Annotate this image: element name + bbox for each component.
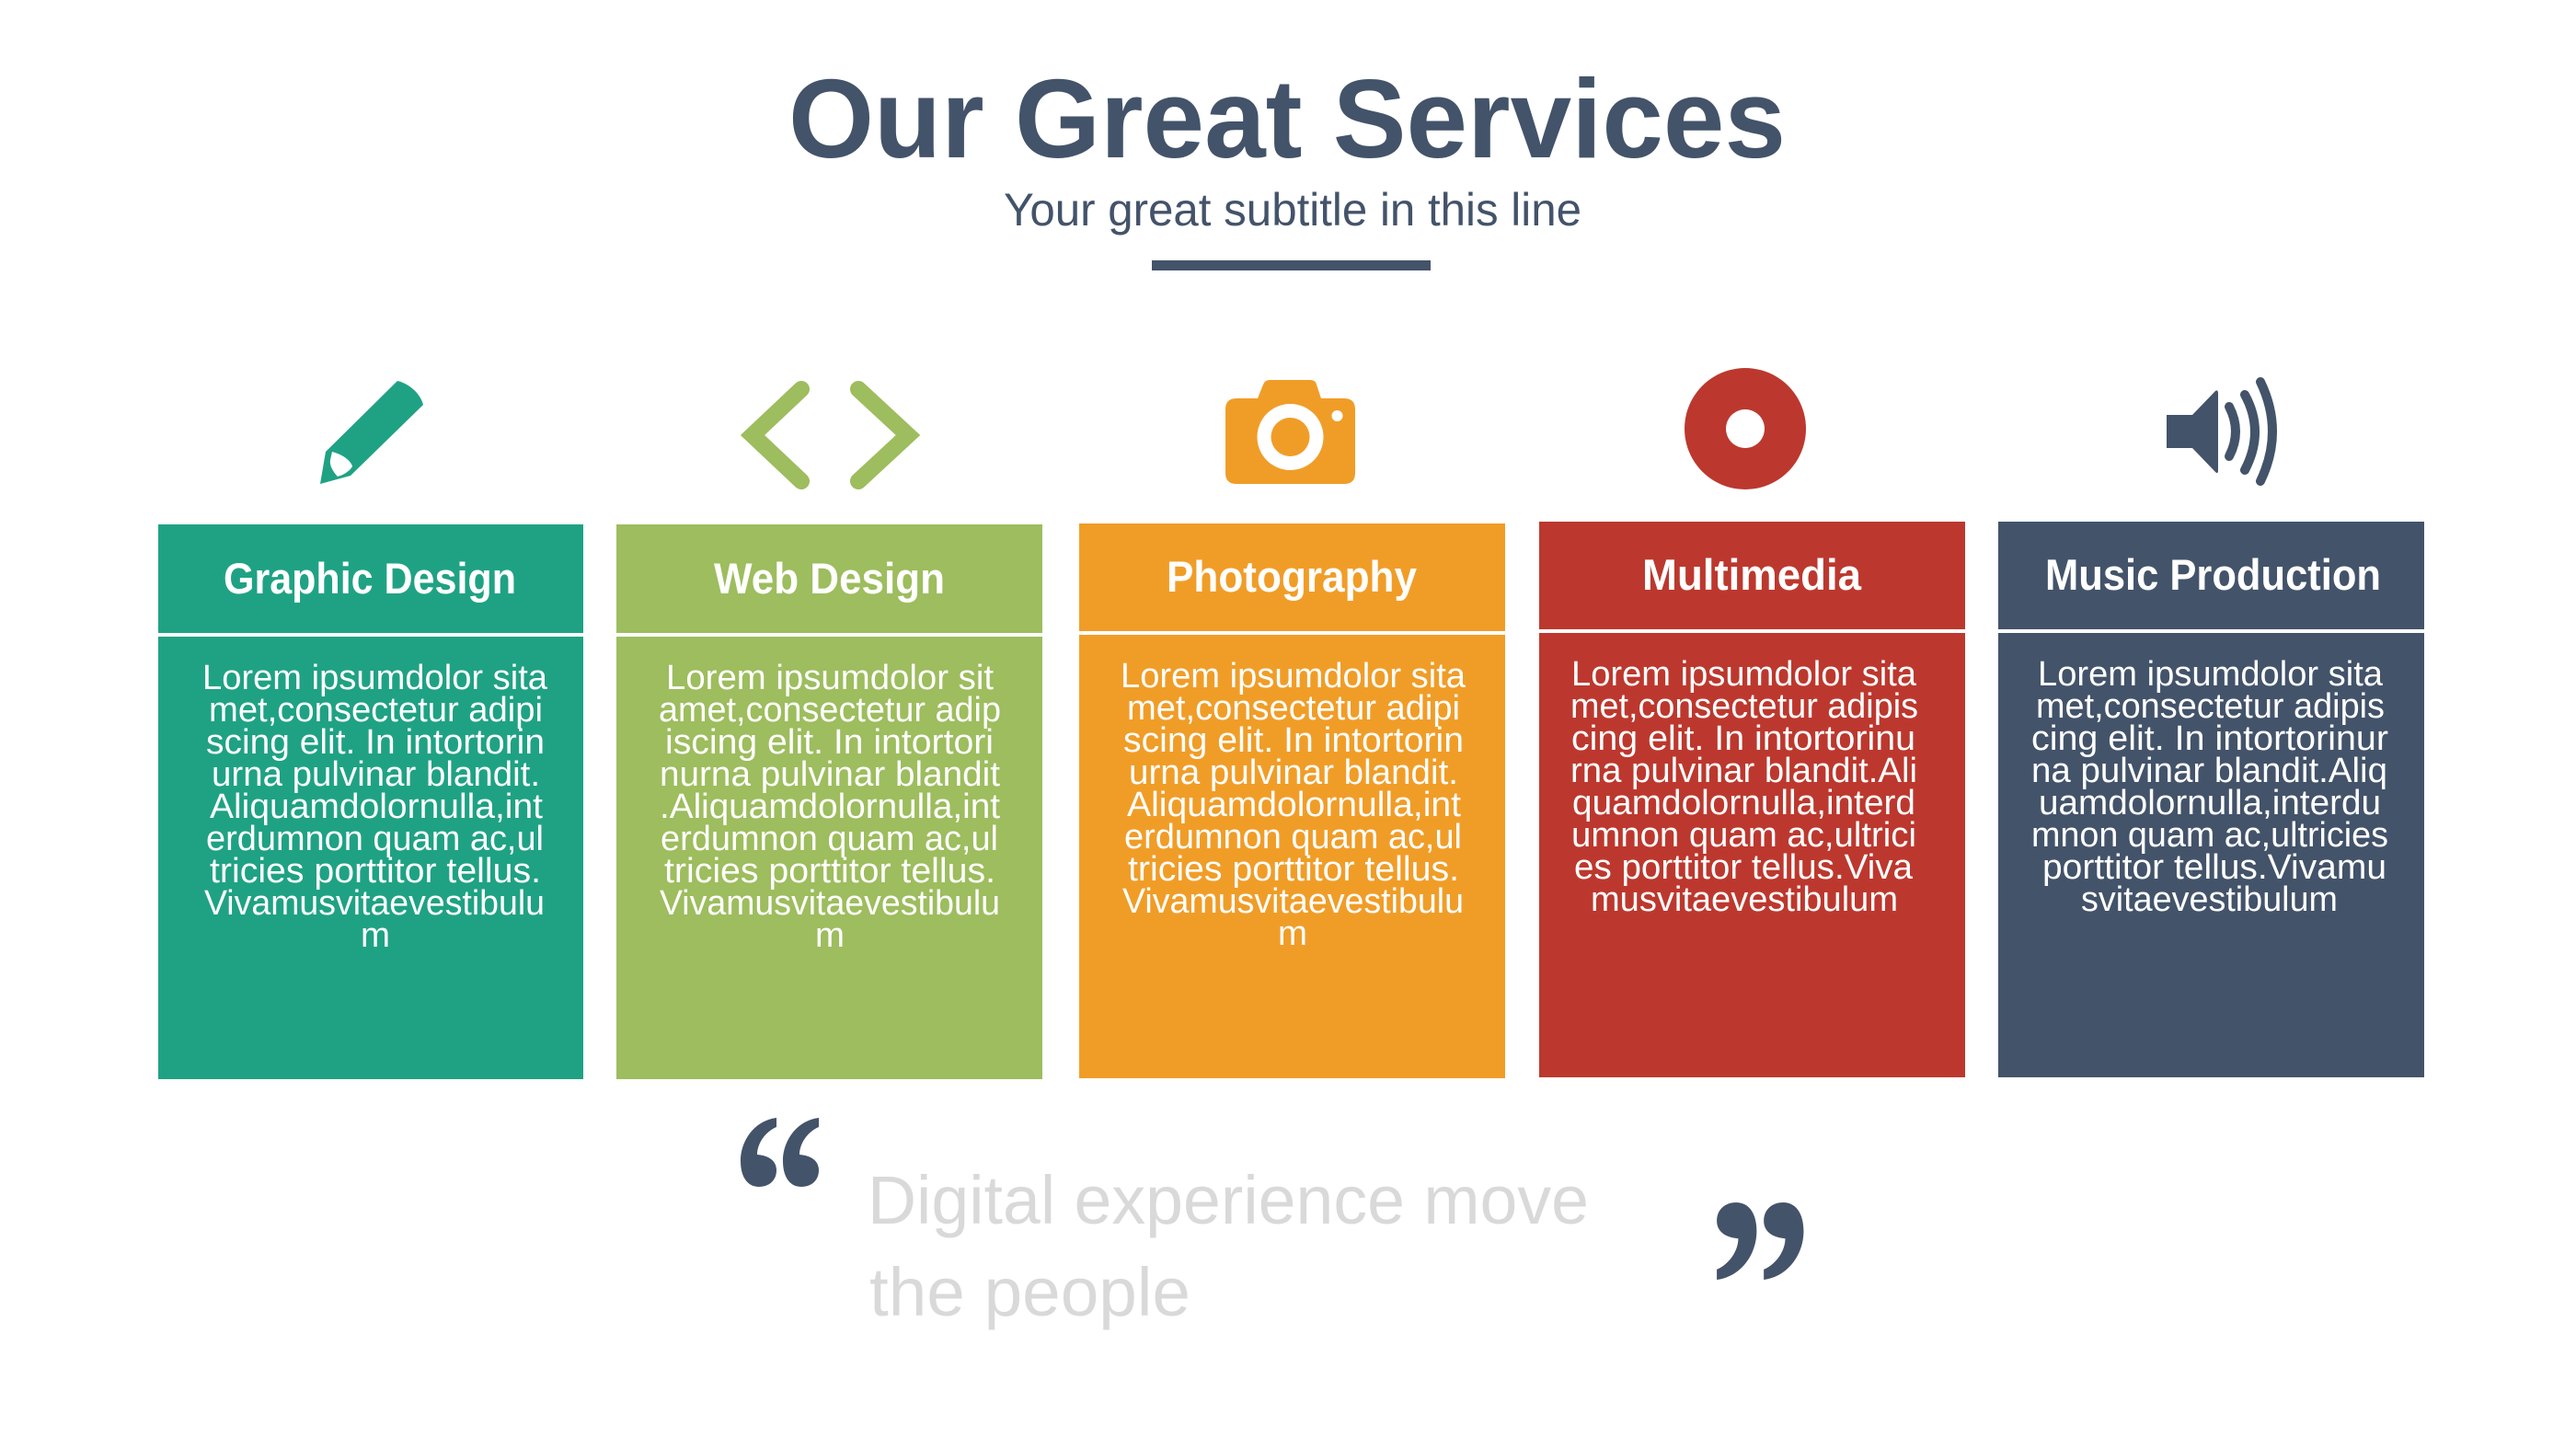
- body text: graphic design: Lorem ipsumdolor sita: [202, 659, 548, 697]
- title underline: [1152, 260, 1431, 270]
- icon: opening quote mark: [741, 1118, 819, 1187]
- panel: photography: [1079, 523, 1505, 1078]
- body text: photography: urna pulvinar blandit.: [1129, 753, 1458, 792]
- icon: code brackets: [753, 389, 908, 481]
- icon: closing quote mark: [1717, 1202, 1803, 1280]
- body text: photography: met,consectetur adipi: [1127, 689, 1460, 728]
- body text: photography: [1121, 657, 1466, 953]
- body text: multimedia: Lorem ipsumdolor sita: [1571, 655, 1917, 694]
- body text: web design: Vivamusvitaevestibulu: [660, 884, 1000, 923]
- body text: graphic design: tricies porttitor tellus.: [210, 852, 541, 891]
- body text: web design: erdumnon quam ac,ul: [661, 820, 998, 858]
- body text: music production: Lorem ipsumdolor sita: [2038, 655, 2384, 694]
- body text: web design: Lorem ipsumdolor sit: [666, 659, 994, 697]
- body text: multimedia: musvitaevestibulum: [1591, 880, 1898, 919]
- body text: graphic design: Aliquamdolornulla,int: [210, 788, 543, 826]
- body text: music production: met,consectetur adipis: [2036, 687, 2385, 726]
- body text: photography: tricies porttitor tellus.: [1128, 850, 1459, 889]
- heading: multimedia: Multimedia: [1642, 550, 1862, 599]
- body text: graphic design: Vivamusvitaevestibulu: [204, 884, 545, 923]
- heading: graphic design: Graphic Design: [224, 554, 516, 603]
- quote text: the people: [869, 1254, 1190, 1330]
- body text: photography: Lorem ipsumdolor sita: [1121, 657, 1466, 696]
- body text: web design: [659, 659, 1001, 955]
- body text: photography: Vivamusvitaevestibulu: [1122, 882, 1464, 921]
- quote text: [868, 1162, 1589, 1330]
- body text: multimedia: [1570, 655, 1918, 919]
- panel: multimedia: [1539, 522, 1965, 1077]
- body text: multimedia: es porttitor tellus.Viva: [1574, 848, 1914, 887]
- heading: music production: Music Production: [2045, 550, 2381, 599]
- body text: web design: iscing elit. In intortori: [665, 723, 994, 762]
- body text: multimedia: rna pulvinar blandit.Ali: [1570, 752, 1917, 790]
- body text: music production: mnon quam ac,ultricies: [2031, 816, 2388, 855]
- header block: [788, 56, 1786, 270]
- icon: speaker: [2167, 382, 2272, 481]
- heading: web design: Web Design: [714, 554, 945, 603]
- body text: multimedia: umnon quam ac,ultrici: [1571, 816, 1916, 855]
- body text: graphic design: [202, 659, 548, 955]
- body text: music production: porttitor tellus.Vivamu: [2042, 848, 2386, 887]
- body text: music production: uamdolornulla,interdu: [2039, 784, 2381, 822]
- panel: graphic design: [158, 524, 583, 1079]
- body text: music production: [2031, 655, 2388, 919]
- body text: graphic design: scing elit. In intortorin: [206, 723, 545, 762]
- body text: multimedia: met,consectetur adipis: [1570, 687, 1918, 726]
- body text: photography: erdumnon quam ac,ul: [1124, 818, 1462, 857]
- body text: photography: scing elit. In intortorin: [1123, 721, 1464, 760]
- body text: music production: cing elit. In intortorinur: [2031, 719, 2388, 758]
- icon: camera: [1225, 380, 1355, 484]
- icon: pencil: [320, 381, 423, 484]
- body text: graphic design: met,consectetur adipi: [209, 691, 543, 730]
- body text: graphic design: erdumnon quam ac,ul: [206, 820, 544, 858]
- body text: web design: tricies porttitor tellus.: [664, 852, 995, 891]
- body text: web design: nurna pulvinar blandit: [660, 755, 1000, 794]
- body text: web design: m: [815, 916, 845, 955]
- body text: graphic design: m: [361, 916, 390, 955]
- body text: multimedia: cing elit. In intortorinu: [1571, 719, 1915, 758]
- body text: graphic design: urna pulvinar blandit.: [212, 755, 540, 794]
- body text: web design: .Aliquamdolornulla,int: [660, 788, 1000, 826]
- panel: web design: [616, 524, 1042, 1079]
- panel: music production: [1998, 522, 2424, 1077]
- title: Our Great Services: [788, 56, 1786, 181]
- body text: music production: svitaevestibulum: [2081, 880, 2338, 919]
- quote text: Digital experience move: [868, 1162, 1589, 1238]
- body text: music production: na pulvinar blandit.Aliq: [2031, 752, 2387, 790]
- heading: photography: Photography: [1167, 552, 1417, 601]
- body text: photography: m: [1278, 914, 1307, 953]
- body text: photography: Aliquamdolornulla,int: [1127, 786, 1461, 824]
- subtitle: Your great subtitle in this line: [1004, 184, 1581, 236]
- body text: web design: amet,consectetur adip: [659, 691, 1001, 730]
- body text: multimedia: quamdolornulla,interd: [1572, 784, 1915, 822]
- icon: disc: [1685, 368, 1806, 489]
